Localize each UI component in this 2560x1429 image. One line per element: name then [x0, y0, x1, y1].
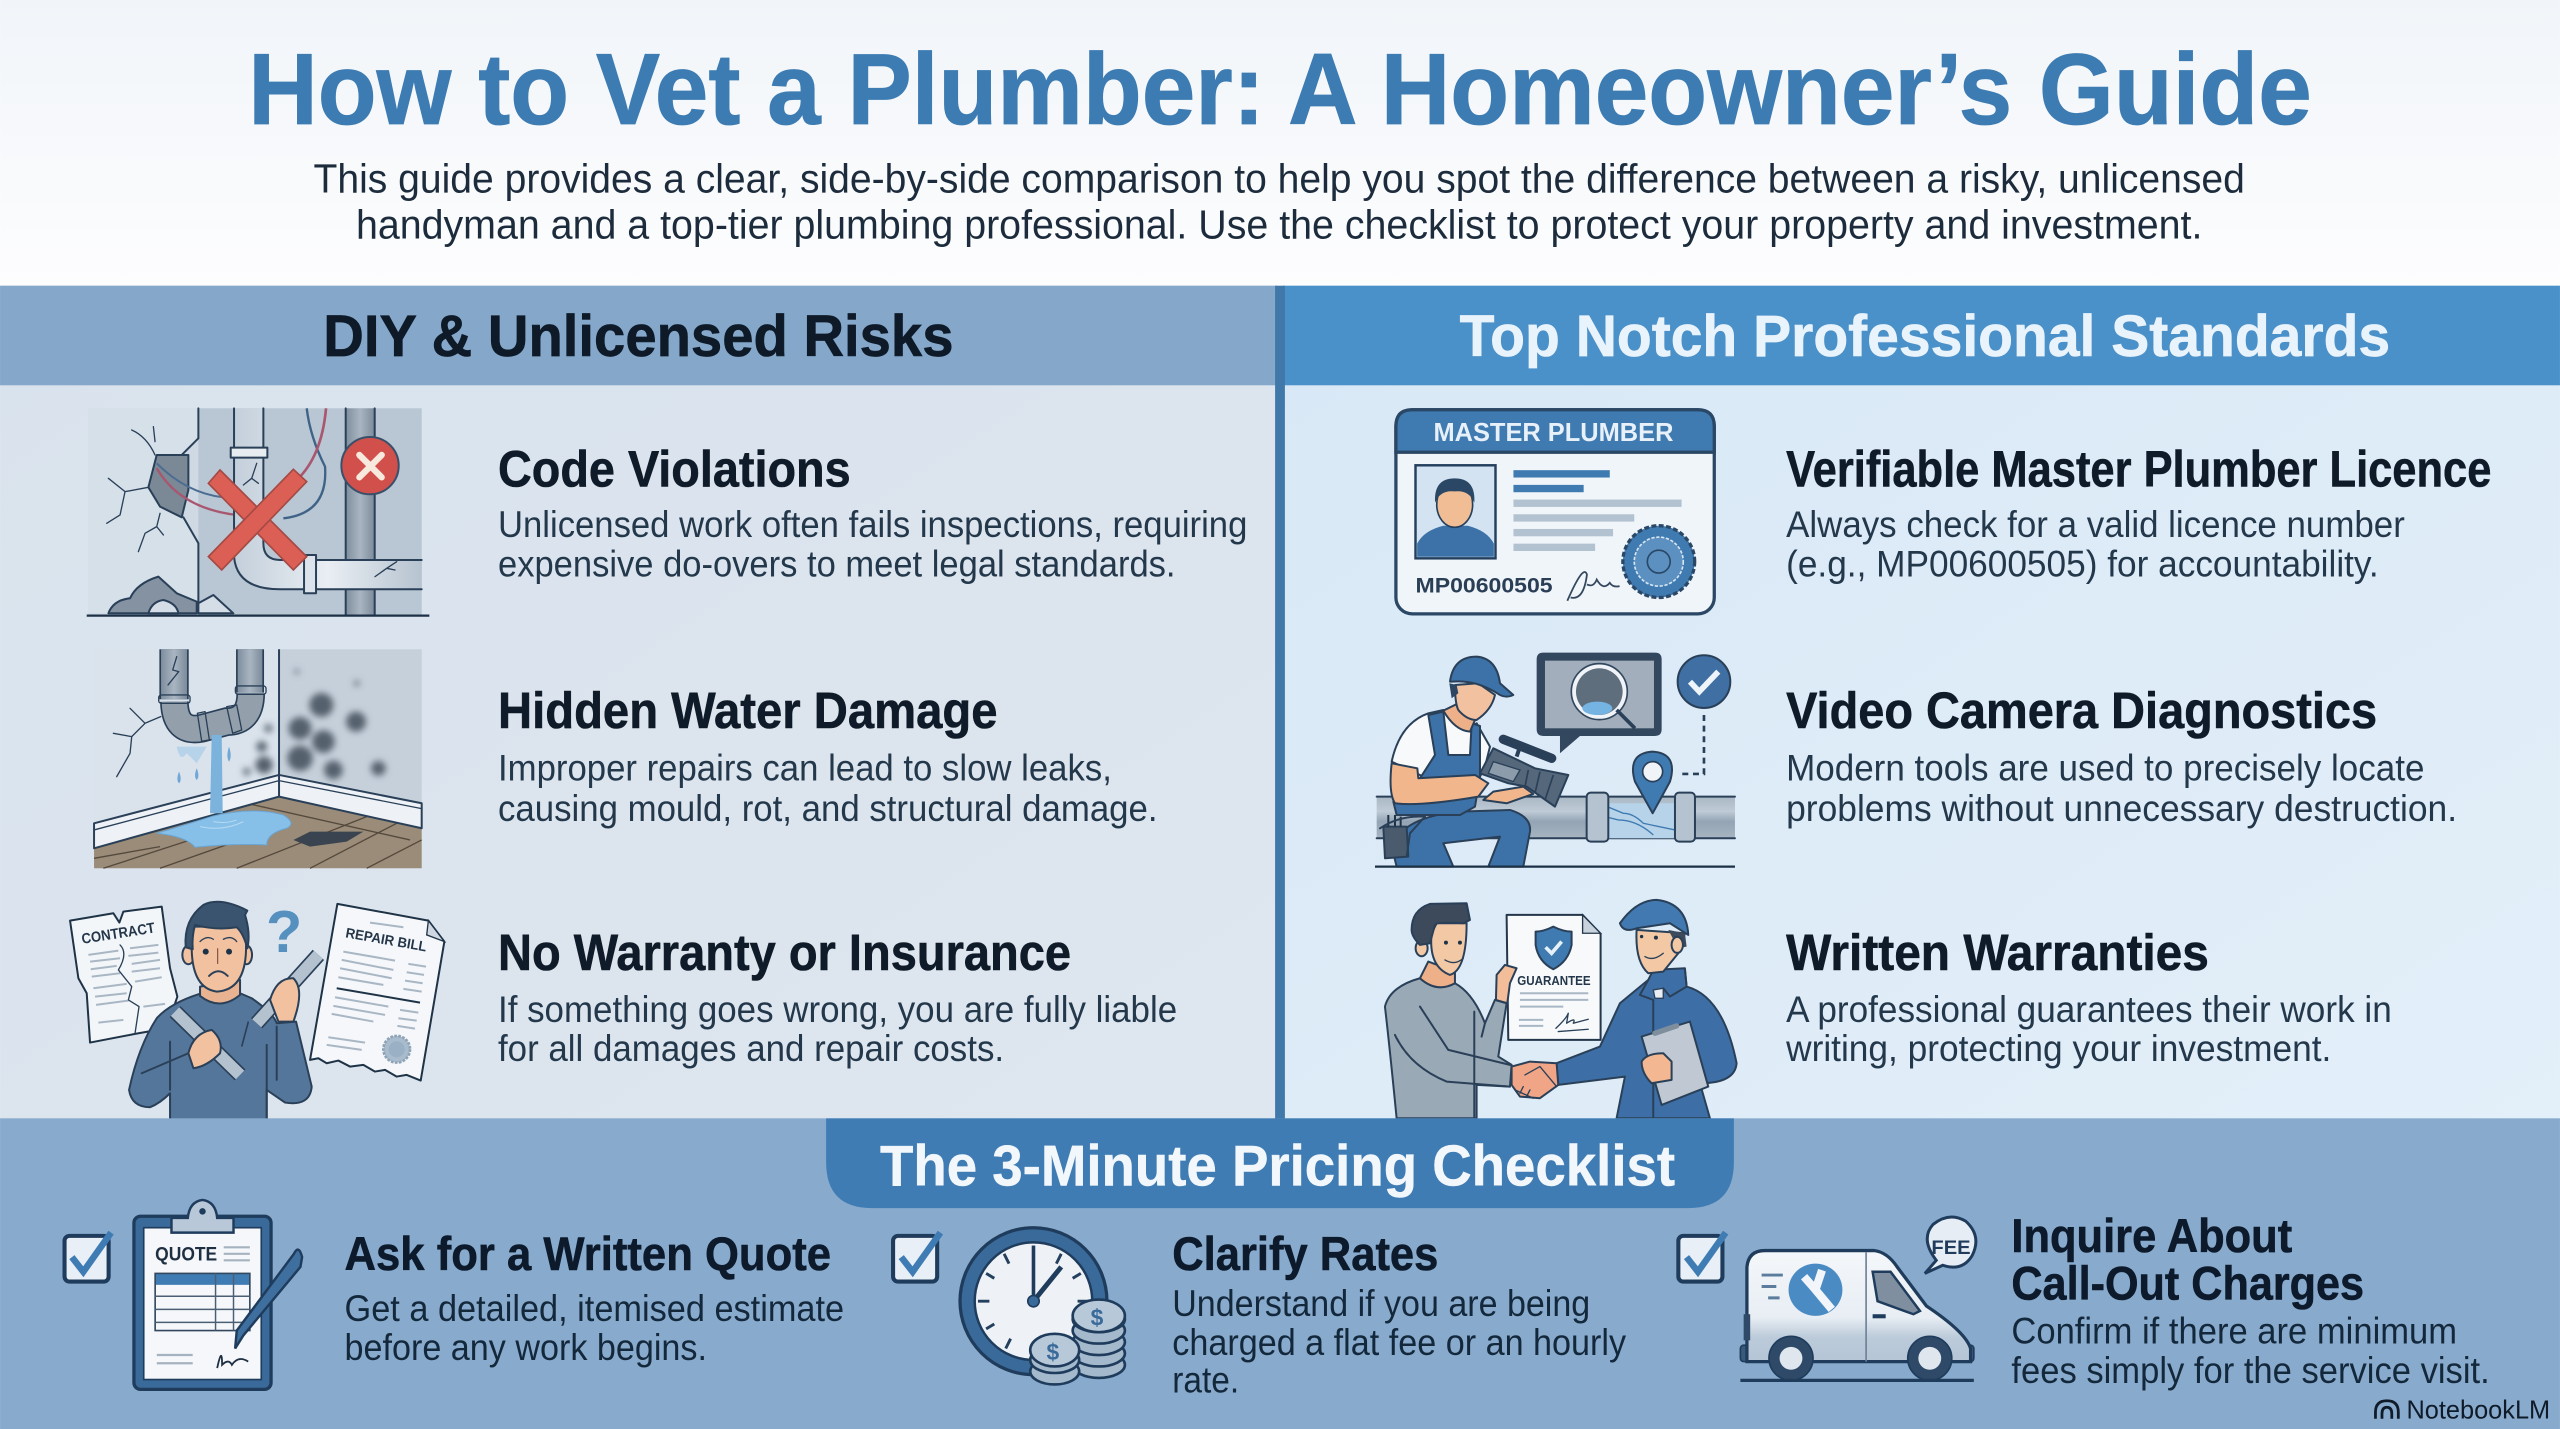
- text: written quote: [345, 1228, 844, 1368]
- text: code violations: expensive do-overs to meet legal standards.: [498, 543, 1176, 584]
- panel: pricing checklist: [0, 1118, 2560, 1429]
- text: written warranties: Written Warranties: [1786, 924, 2209, 981]
- text: video camera: Video Camera Diagnostics: [1786, 682, 2377, 739]
- icon: checkbox three: [1678, 1233, 1726, 1282]
- intro text: [314, 156, 2245, 247]
- icon: service van: FEE: [1931, 1237, 1971, 1259]
- text: no warranty: for all damages and repair costs.: [498, 1028, 1004, 1069]
- icon: worried homeowner with contract and repair bill: [70, 898, 444, 1120]
- text: no warranty: [498, 924, 1177, 1069]
- text: written warranties: A professional guarantees their work in: [1786, 989, 2392, 1030]
- text: no warranty: If something goes wrong, you are fully liable: [498, 989, 1177, 1030]
- icon: master plumber licence card: MASTER PLUMBER: [1433, 417, 1674, 447]
- text: video camera: Modern tools are used to precisely locate: [1786, 747, 2424, 788]
- text: clarify rates: Understand if you are being: [1172, 1283, 1590, 1324]
- icon: checkbox one: [65, 1233, 111, 1282]
- text: written warranties: [1785, 924, 2392, 1069]
- text: video camera: [1786, 682, 2457, 829]
- heading band: DIY: [0, 286, 1277, 385]
- text: call-out charges: Inquire About: [2011, 1210, 2292, 1263]
- heading band: DIY: DIY & Unlicensed Risks: [323, 304, 953, 369]
- icon: master plumber licence card: [1396, 410, 1714, 614]
- text: clarify rates: charged a flat fee or an hourly: [1172, 1322, 1627, 1363]
- text: licence: (e.g., MP00600505) for accountability.: [1786, 543, 2379, 584]
- icon: service van: [1740, 1217, 1976, 1380]
- text: no warranty: No Warranty or Insurance: [498, 924, 1071, 981]
- icon: written quote clipboard: QUOTE: [155, 1243, 217, 1265]
- intro text: handyman and a top-tier plumbing professional. Use the checklist to protect your property and investment.: [356, 201, 2202, 247]
- icon: handshake with written guarantee: GUARANTEE: [1517, 974, 1591, 988]
- header background: [0, 0, 2560, 287]
- icon: clock and coins: $: [1091, 1305, 1104, 1331]
- panel: DIY and unlicensed risks: [0, 286, 1277, 1120]
- icon: written quote clipboard: [134, 1200, 302, 1389]
- text: video camera: problems without unnecessary destruction.: [1786, 788, 2457, 829]
- watermark: NotebookLM: NotebookLM: [2406, 1395, 2550, 1425]
- icon: video camera diagnostics: [1375, 653, 1735, 867]
- text: code violations: [498, 441, 1247, 584]
- text: written quote: Ask for a Written Quote: [345, 1228, 831, 1281]
- panel: professional standards: [1283, 286, 2560, 1120]
- icon: code violation pipes: [87, 408, 429, 616]
- text: written quote: before any work begins.: [345, 1327, 707, 1368]
- icon: worried homeowner with contract and repair bill: CONTRACT: [81, 920, 156, 948]
- icon: worried homeowner with contract and repair bill: ?: [266, 898, 302, 965]
- checklist heading tab: [826, 1118, 1734, 1208]
- text: written warranties: writing, protecting your investment.: [1785, 1028, 2331, 1069]
- icon: checkbox two: [893, 1233, 940, 1282]
- icon: hidden water damage: [94, 649, 422, 868]
- icon: worried homeowner with contract and repair bill: REPAIR BILL: [345, 924, 428, 955]
- text: call-out charges: [2011, 1210, 2490, 1391]
- text: call-out charges: fees simply for the service visit.: [2011, 1350, 2490, 1391]
- text: call-out charges: Call-Out Charges: [2011, 1258, 2364, 1311]
- text: hidden water damage: Hidden Water Damage: [498, 682, 998, 739]
- text: clarify rates: rate.: [1172, 1360, 1239, 1401]
- text: code violations: Code Violations: [498, 441, 851, 498]
- text: clarify rates: [1172, 1228, 1627, 1401]
- checklist heading tab: The 3-Minute Pricing Checklist: [880, 1134, 1675, 1198]
- centre divider: [1275, 286, 1285, 1120]
- text: hidden water damage: [498, 682, 1158, 829]
- icon: clock and coins: $: [1047, 1339, 1060, 1365]
- text: clarify rates: Clarify Rates: [1172, 1228, 1438, 1281]
- icon: handshake with written guarantee: [1385, 900, 1737, 1118]
- text: hidden water damage: causing mould, rot, and structural damage.: [498, 788, 1158, 829]
- icon: clock and coins: [960, 1228, 1125, 1384]
- text: code violations: Unlicensed work often fails inspections, requiring: [498, 504, 1247, 545]
- text: licence: Always check for a valid licence number: [1786, 504, 2405, 545]
- heading band: professional: Top Notch Professional Standards: [1460, 304, 2390, 369]
- text: written quote: Get a detailed, itemised estimate: [345, 1288, 844, 1329]
- title: How to Vet a Plumber: A Homeowner’s Guide: [248, 33, 2312, 146]
- heading band: professional: [1283, 286, 2560, 385]
- text: hidden water damage: Improper repairs can lead to slow leaks,: [498, 747, 1112, 788]
- icon: master plumber licence card: MP00600505: [1416, 575, 1553, 598]
- text: licence: [1786, 441, 2491, 584]
- text: call-out charges: Confirm if there are minimum: [2011, 1311, 2457, 1352]
- intro text: This guide provides a clear, side-by-side comparison to help you spot the difference between a risky, unlicensed: [314, 156, 2245, 202]
